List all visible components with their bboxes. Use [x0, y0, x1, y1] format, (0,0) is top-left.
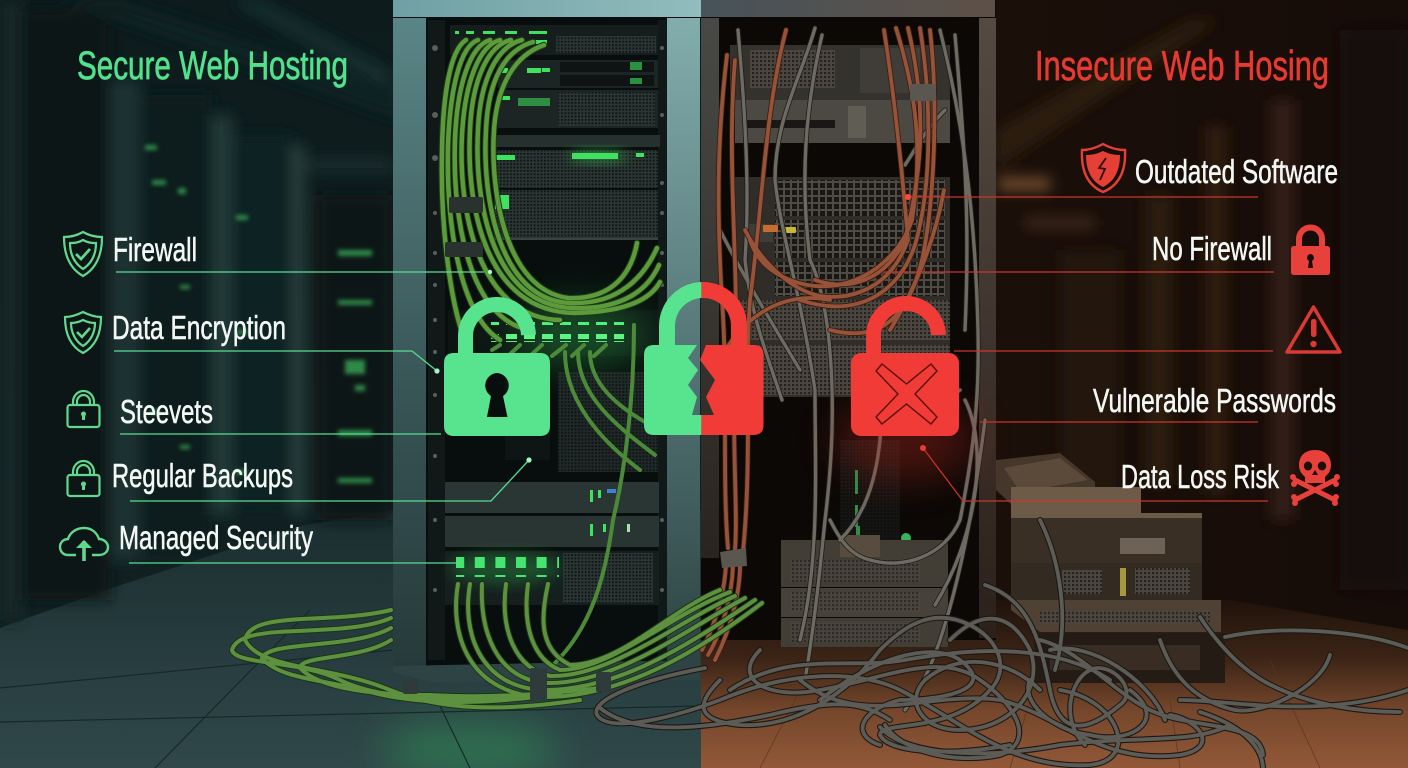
secure item: Regular Backups: Regular Backups: [112, 457, 293, 494]
green half: [644, 282, 701, 435]
secure item: Managed Security: Managed Security: [119, 519, 313, 556]
rack frame top: [701, 0, 995, 17]
switch panel with lit ports: [448, 305, 658, 365]
connector lines: secure: [114, 270, 532, 563]
icon: shield check: [64, 232, 102, 276]
secure item: Data Encryption: [65, 309, 286, 353]
insecure item: No Firewall: No Firewall: [1152, 230, 1272, 267]
messy cables on the insecure rack: [702, 28, 985, 710]
status lights upper: [455, 31, 644, 209]
title: secure: Secure Web Hosting: [77, 44, 348, 88]
insecure item: warning icon: [1287, 307, 1340, 352]
background: insecure data center: [701, 0, 1408, 768]
rack post left: [701, 18, 719, 558]
insecure item: Outdated Software: [1082, 144, 1338, 192]
insecure item: Data Loss Risk: [1121, 450, 1340, 506]
secure item: Steevets: [68, 391, 213, 430]
server units upper: [450, 25, 660, 240]
rack rail screws: [432, 45, 664, 592]
server units lower: [445, 482, 659, 605]
copper cables: [702, 28, 944, 660]
rack post right: [979, 18, 996, 638]
rack frame top: [393, 0, 701, 17]
icon: split cracked padlock: [644, 282, 764, 435]
top cable bundle: [442, 40, 660, 350]
lower cable bundle: [232, 584, 762, 707]
X mark: [876, 364, 937, 424]
insecure server rack: [701, 0, 996, 640]
bundle straps: [445, 197, 483, 257]
rack post left: [393, 18, 426, 666]
lit ethernet ports: [450, 552, 560, 584]
floor cable straps: [403, 668, 611, 700]
icon: shield check: [65, 312, 101, 353]
patch cables: [492, 325, 660, 666]
icon: locked green padlock: [444, 304, 550, 436]
rack post right: [667, 18, 700, 670]
secure item: Managed Security: [60, 519, 313, 561]
secure item: Data Encryption: Data Encryption: [112, 309, 286, 346]
server units upper: [730, 45, 950, 143]
background: secure data center: [0, 0, 701, 768]
indicator lights orange and yellow: [763, 225, 796, 233]
lower dark mesh section: [505, 370, 658, 472]
connector lines: insecure: [884, 194, 1274, 501]
insecure item: Outdated Software: Outdated Software: [1135, 153, 1338, 190]
server box stack center: [781, 535, 948, 647]
icon: cloud upload: [60, 528, 108, 561]
icon: skull and crossbones: [1290, 450, 1340, 506]
secure server rack: [393, 0, 701, 682]
icon: broken shield: [1082, 144, 1125, 192]
icon: open red padlock with X: [851, 303, 959, 436]
red glow: [835, 400, 975, 480]
secure item: Firewall: [64, 231, 197, 276]
red half: [700, 282, 764, 435]
neat green cables: [232, 40, 762, 707]
rack base: [393, 660, 700, 682]
secure item: Firewall: Firewall: [113, 231, 197, 268]
rows of ventilated chassis: [735, 177, 950, 397]
icon: red padlock: [1291, 228, 1330, 275]
tangled floor cables: [596, 520, 1408, 768]
icon: padlock outline: [68, 461, 100, 496]
green status lights in lower rack: [855, 470, 911, 543]
secure item: Regular Backups: [68, 457, 293, 496]
icon: padlock outline: [68, 391, 100, 427]
insecure item: Data Loss Risk: Data Loss Risk: [1121, 458, 1279, 495]
old equipment stack right: [996, 453, 1225, 683]
gray cables: [720, 28, 985, 710]
secure item: Steevets: Steevets: [120, 393, 213, 430]
cable clamp: [720, 84, 936, 568]
